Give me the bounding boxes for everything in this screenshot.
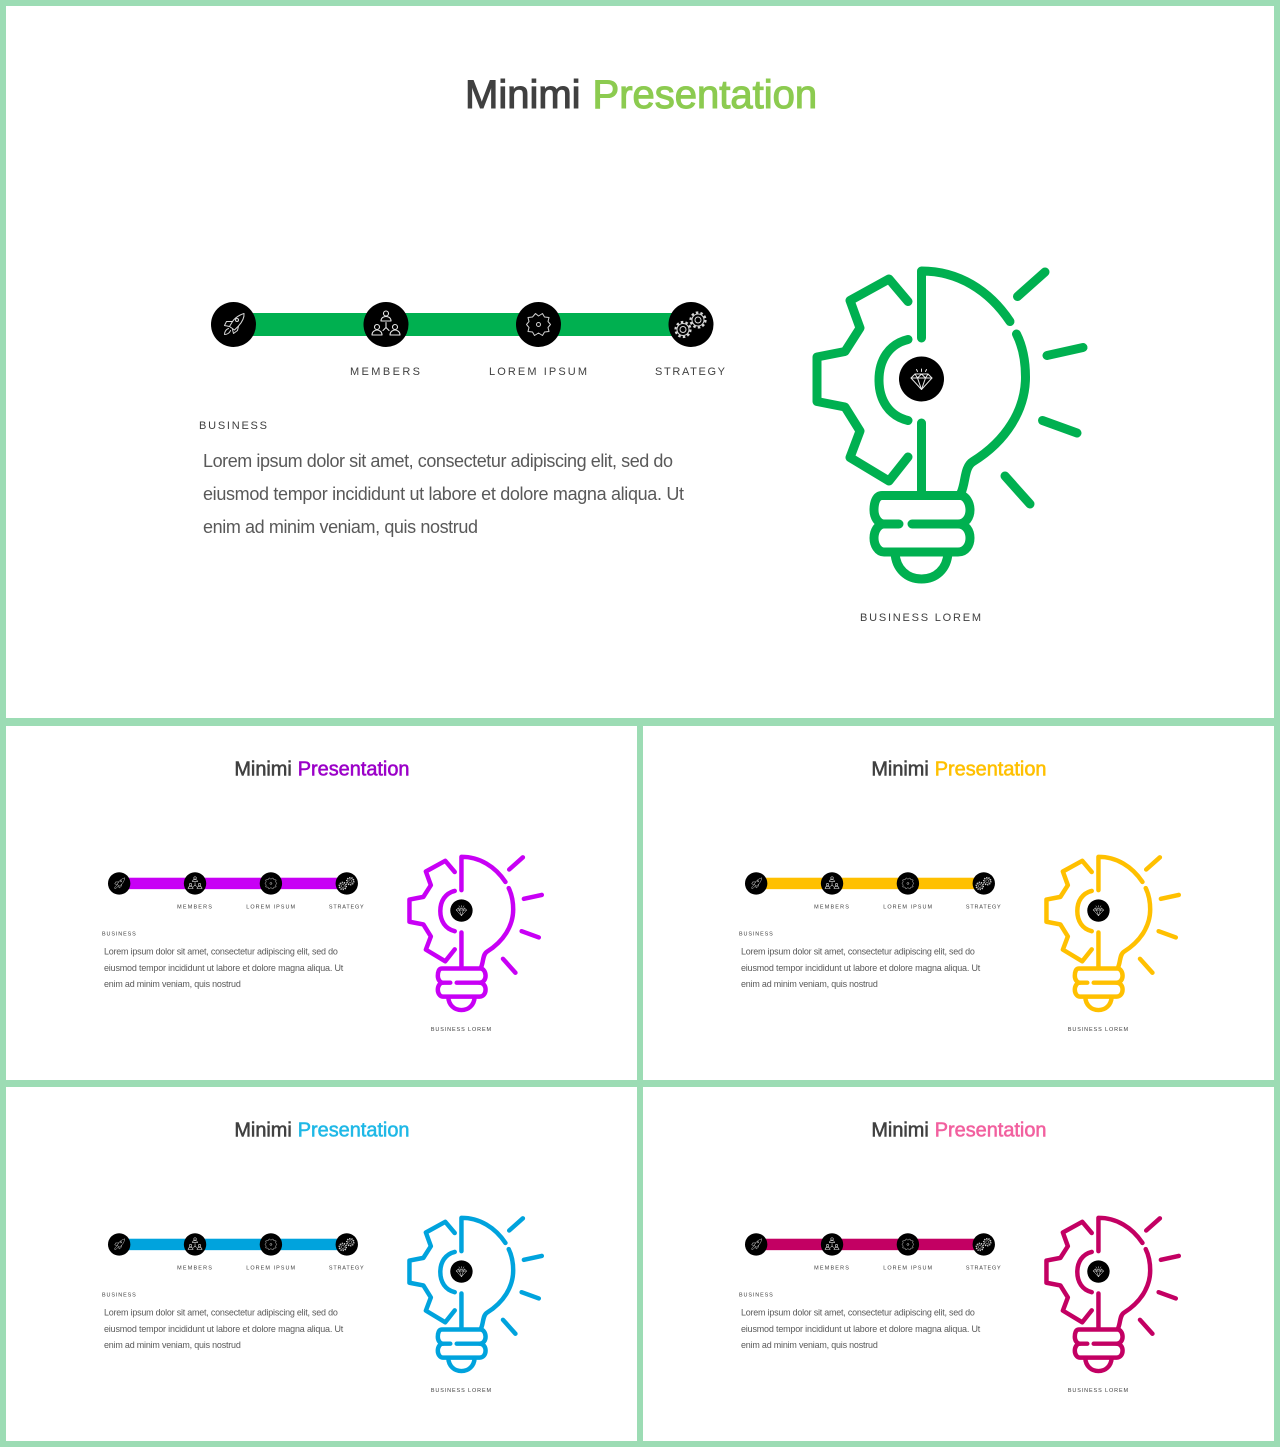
label: members: MEMBERS: [177, 1266, 212, 1272]
icon: strategy gears: [973, 1233, 995, 1256]
icon: strategy gears: [336, 872, 358, 895]
icon: lightbulb gear: [1046, 1218, 1179, 1371]
body text: enim ad minim veniam, quis nostrud: [104, 979, 241, 989]
icon: gear: [260, 1233, 282, 1256]
body text: Lorem ipsum dolor sit amet, consectetur adipiscing elit, sed do: [104, 1307, 338, 1317]
title: MinimiPresentation: [871, 1120, 1046, 1142]
panel: blue slide: [6, 1087, 637, 1441]
icon: members: [821, 1233, 843, 1256]
icon: lightbulb gear: [409, 857, 542, 1010]
label: business lorem: BUSINESS LOREM: [1068, 1027, 1128, 1033]
heading: business: BUSINESS: [102, 931, 136, 937]
label: strategy: STRATEGY: [966, 1266, 1001, 1272]
label: lorem ipsum: LOREM IPSUM: [246, 1266, 295, 1272]
timeline bar: [756, 878, 984, 889]
icon: diamond: [899, 356, 944, 402]
body text: enim ad minim veniam, quis nostrud: [104, 1340, 241, 1350]
body text: Lorem ipsum dolor sit amet, consectetur adipiscing elit, sed do: [104, 946, 338, 956]
icon: rocket: [745, 872, 767, 895]
heading: business: BUSINESS: [739, 931, 773, 937]
icon: gear: [897, 872, 919, 895]
label: lorem ipsum: LOREM IPSUM: [883, 1266, 932, 1272]
icon: gear: [516, 302, 561, 347]
timeline bar: [119, 878, 347, 889]
heading: business: BUSINESS: [102, 1292, 136, 1298]
title: Minimi Presentation: [465, 73, 817, 117]
label: members: MEMBERS: [350, 366, 420, 378]
icon: strategy gears: [668, 302, 714, 347]
label: lorem ipsum: LOREM IPSUM: [883, 905, 932, 911]
icon: rocket: [108, 1233, 130, 1256]
label: strategy: STRATEGY: [329, 905, 364, 911]
icon: strategy gears: [336, 1233, 358, 1256]
label: members: MEMBERS: [814, 1266, 849, 1272]
panel: purple slide: [6, 726, 637, 1080]
label: members: MEMBERS: [814, 905, 849, 911]
title: MinimiPresentation: [234, 1120, 409, 1142]
body text: [741, 946, 981, 989]
timeline bar: [233, 313, 691, 336]
icon: lightbulb gear: [409, 1218, 542, 1371]
label: members: MEMBERS: [177, 905, 212, 911]
icon: diamond: [450, 899, 473, 922]
body text: [741, 1307, 981, 1350]
body text: eiusmod tempor incididunt ut labore et dolore magna aliqua. Ut: [203, 484, 684, 504]
label: strategy: STRATEGY: [329, 1266, 364, 1272]
body text: [203, 451, 684, 537]
icon: lightbulb gear: [1046, 857, 1179, 1010]
body text: [104, 946, 344, 989]
panel: main green slide: [6, 6, 1274, 718]
body text: Lorem ipsum dolor sit amet, consectetur adipiscing elit, sed do: [203, 451, 673, 471]
timeline bar: [119, 1239, 347, 1250]
panel: crimson slide: [643, 1087, 1274, 1441]
icon: diamond: [450, 1260, 473, 1283]
body text: eiusmod tempor incididunt ut labore et dolore magna aliqua. Ut: [104, 1324, 344, 1334]
body text: enim ad minim veniam, quis nostrud: [203, 517, 478, 537]
label: business lorem: BUSINESS LOREM: [1068, 1388, 1128, 1394]
body text: [104, 1307, 344, 1350]
body text: enim ad minim veniam, quis nostrud: [741, 979, 878, 989]
panel: yellow slide: [643, 726, 1274, 1080]
icon: rocket: [108, 872, 130, 895]
icon: diamond: [1087, 1260, 1110, 1283]
icon: gear: [897, 1233, 919, 1256]
body text: eiusmod tempor incididunt ut labore et dolore magna aliqua. Ut: [741, 963, 981, 973]
icon: lightbulb gear: [817, 271, 1083, 579]
icon: diamond: [1087, 899, 1110, 922]
label: lorem ipsum: LOREM IPSUM: [489, 366, 587, 378]
body text: eiusmod tempor incididunt ut labore et dolore magna aliqua. Ut: [104, 963, 344, 973]
body text: enim ad minim veniam, quis nostrud: [741, 1340, 878, 1350]
label: strategy: STRATEGY: [966, 905, 1001, 911]
icon: members: [364, 302, 408, 347]
label: business lorem: BUSINESS LOREM: [431, 1027, 491, 1033]
icon: members: [184, 872, 206, 895]
icon: members: [821, 872, 843, 895]
timeline bar: [756, 1239, 984, 1250]
icon: members: [184, 1233, 206, 1256]
body text: Lorem ipsum dolor sit amet, consectetur adipiscing elit, sed do: [741, 1307, 975, 1317]
title: MinimiPresentation: [234, 759, 409, 781]
icon: rocket: [745, 1233, 767, 1256]
body text: Lorem ipsum dolor sit amet, consectetur adipiscing elit, sed do: [741, 946, 975, 956]
title: MinimiPresentation: [871, 759, 1046, 781]
label: business lorem: BUSINESS LOREM: [431, 1388, 491, 1394]
label: business lorem: BUSINESS LOREM: [860, 612, 981, 624]
icon: rocket: [211, 302, 256, 347]
heading: business: BUSINESS: [199, 420, 267, 432]
body text: eiusmod tempor incididunt ut labore et dolore magna aliqua. Ut: [741, 1324, 981, 1334]
heading: business: BUSINESS: [739, 1292, 773, 1298]
label: lorem ipsum: LOREM IPSUM: [246, 905, 295, 911]
icon: gear: [260, 872, 282, 895]
label: strategy: STRATEGY: [655, 366, 726, 378]
icon: strategy gears: [973, 872, 995, 895]
